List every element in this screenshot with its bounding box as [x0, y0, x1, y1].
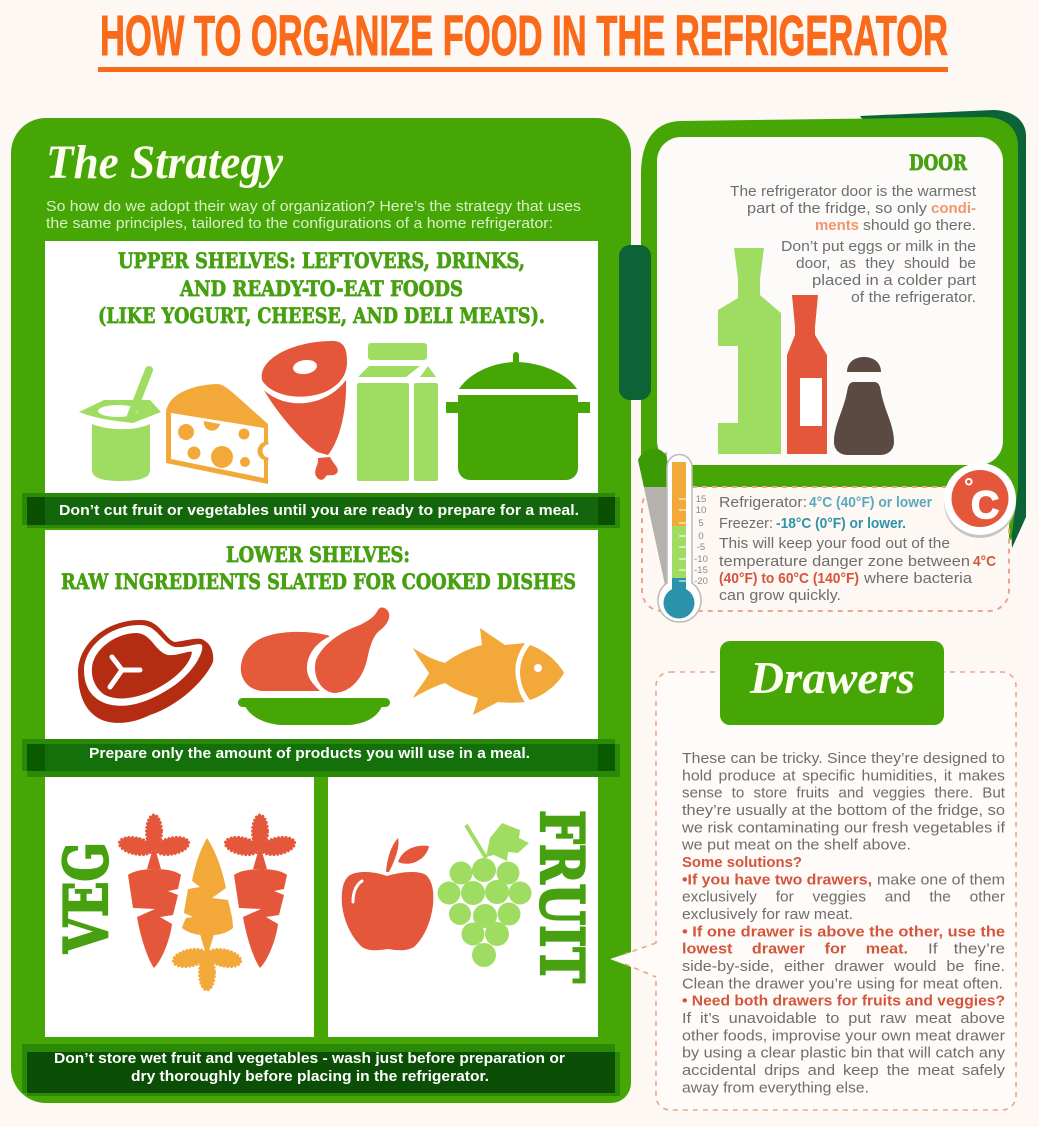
- intro text: [46, 199, 581, 232]
- intro text: So how do we adopt their way of organization? Here’s the strategy that uses: [46, 199, 581, 215]
- thermometer: [638, 448, 708, 622]
- icon: left carrot: [118, 815, 190, 968]
- panel: temperature: [642, 487, 1009, 611]
- panel: the strategy: [11, 118, 631, 1103]
- icon: middle carrot: [172, 838, 242, 990]
- icon: apple: [342, 838, 433, 950]
- drawers text: Some solutions?: [682, 854, 802, 871]
- drawers text: make one of them: [877, 871, 1005, 888]
- temperature text: 4°C: [973, 553, 996, 570]
- icon: ham: [262, 341, 347, 480]
- heading: upper shelves: (LIKE YOGURT, CHEESE, AND DELI MEATS).: [98, 303, 545, 328]
- drawers text: If it’s unavoidable to put raw meat above: [682, 1010, 1005, 1027]
- thermometer scale: 0: [698, 531, 704, 542]
- icon: celsius badge: [944, 463, 1016, 538]
- door text: ments: [815, 217, 859, 234]
- drawers text: exclusively for raw meat.: [682, 906, 853, 923]
- heading: drawers: Drawers: [749, 652, 915, 703]
- door text: [730, 183, 977, 306]
- drawers text: they’re usually at the bottom of the fridge, so: [682, 802, 1005, 819]
- icon: red bottle: [787, 295, 827, 454]
- label: veg: VEG: [52, 842, 122, 954]
- heading: lower shelves: [61, 542, 576, 594]
- panel: veg: [45, 777, 314, 1037]
- heading: drawers: [720, 641, 944, 725]
- callout band: cut fruit: Don’t cut fruit or vegetables until you are ready to prepare for a meal.: [59, 502, 579, 519]
- thermometer scale: -20: [694, 576, 708, 587]
- callout band: wet fruit: [22, 1044, 620, 1096]
- drawers text: away from everything else.: [682, 1079, 869, 1096]
- drawers text: we put meat on the shelf above.: [681, 837, 911, 854]
- drawers text: sense to store fruits and veggies there. But: [682, 785, 1006, 802]
- heading: upper shelves: AND READY-TO-EAT FOODS: [179, 276, 463, 301]
- icon: right carrot: [224, 815, 296, 968]
- drawers text: we risk contaminating our fresh vegetables if: [681, 819, 1006, 836]
- heading: upper shelves: UPPER SHELVES: LEFTOVERS, DRINKS,: [118, 248, 525, 273]
- panel: fruit: [328, 777, 598, 1037]
- panel: refrigerator door: [641, 110, 1026, 548]
- door text: placed in a colder part: [812, 272, 977, 289]
- icon: roast chicken: [238, 607, 390, 725]
- door text: part of the fridge, so only: [747, 200, 928, 217]
- speech tail: [610, 943, 658, 977]
- temperature text: 4°C (40°F) or lower: [809, 494, 932, 511]
- drawers text: Clean the drawer you’re using for meat often.: [682, 975, 1003, 992]
- callout band: cut fruit: [22, 493, 620, 528]
- callout band: prepare only: [22, 739, 620, 777]
- door text: door, as they should be: [796, 255, 976, 272]
- icon: cheese: [166, 384, 278, 484]
- heading: door: DOOR: [909, 150, 967, 175]
- callout band: prepare only: Prepare only the amount of products you will use in a meal.: [89, 745, 530, 762]
- drawers text: •If you have two drawers,: [682, 871, 872, 888]
- thermometer scale: -10: [694, 554, 708, 565]
- drawers text: accidental drips and keep the meat safely: [682, 1062, 1006, 1079]
- icon: fish: [413, 628, 564, 715]
- heading: upper shelves: [98, 248, 545, 328]
- label: fruit: FRUIT: [526, 810, 596, 983]
- temperature text: where bacteria: [863, 570, 973, 587]
- temperature text: [719, 494, 996, 604]
- icon: celsius badge: °: [964, 474, 974, 501]
- icon: celsius badge: C: [971, 484, 999, 527]
- door text: Don’t put eggs or milk in the: [781, 238, 976, 255]
- icon: cooking pot: [446, 352, 590, 480]
- drawers text: • If one drawer is above the other, use the: [682, 923, 1005, 940]
- door text: The refrigerator door is the warmest: [730, 183, 977, 200]
- drawers text: by using a clear plastic bin that will catch any: [682, 1045, 1006, 1062]
- icon: grapes: [438, 823, 532, 967]
- thermometer scale: -15: [694, 565, 708, 576]
- icon: steak: [78, 620, 213, 723]
- temperature text: (40°F) to 60°C (140°F): [719, 570, 859, 587]
- panel: drawers: [610, 641, 1016, 1110]
- icon: green bottle: [718, 248, 781, 454]
- thermometer scale: 10: [696, 505, 706, 516]
- panel: upper shelves: [45, 241, 598, 494]
- drawers text: side-by-side, either drawer would be fine.: [682, 958, 1005, 975]
- heading: lower shelves: LOWER SHELVES:: [226, 542, 410, 567]
- temperature text: Freezer:: [719, 515, 773, 532]
- callout text: dry thoroughly before placing in the refrigerator.: [131, 1068, 489, 1085]
- temperature text: -18°C (0°F) or lower.: [776, 515, 906, 532]
- door text: of the refrigerator.: [851, 289, 976, 306]
- drawers text: hold produce at specific humidities, it makes: [682, 767, 1005, 784]
- icon: milk carton: [357, 343, 438, 481]
- temperature text: Refrigerator:: [719, 494, 807, 511]
- temperature text: can grow quickly.: [719, 587, 841, 604]
- drawers text: exclusively for veggies and the other: [682, 889, 1005, 906]
- temperature text: This will keep your food out of the: [719, 535, 950, 552]
- drawers text: lowest drawer for meat.: [682, 941, 908, 958]
- drawers text: • Need both drawers for fruits and veggies?: [682, 993, 1005, 1010]
- panel: lower shelves: [45, 530, 598, 741]
- door handle: [619, 245, 651, 400]
- icon: shaker: [834, 357, 894, 455]
- callout text: Don’t store wet fruit and vegetables - wash just before preparation or: [54, 1050, 565, 1067]
- drawers text: other foods, improvise your own meat drawer: [682, 1027, 1005, 1044]
- drawers text: If they’re: [928, 941, 1005, 958]
- door text: condi-: [931, 200, 976, 217]
- heading: the strategy: The Strategy: [46, 136, 284, 189]
- door text: should go there.: [863, 217, 976, 234]
- temperature text: temperature danger zone between: [719, 553, 970, 570]
- drawers text: These can be tricky. Since they’re designed to: [682, 750, 1005, 767]
- thermometer scale: [694, 494, 708, 587]
- heading: lower shelves: RAW INGREDIENTS SLATED FOR COOKED DISHES: [61, 569, 576, 594]
- icon: yogurt: [79, 370, 161, 481]
- intro text: the same principles, tailored to the configurations of a home refrigerator:: [46, 216, 553, 232]
- drawers text: [681, 750, 1006, 1096]
- thermometer scale: 15: [696, 494, 706, 505]
- thermometer scale: 5: [698, 518, 704, 529]
- thermometer scale: -5: [697, 542, 705, 553]
- callout text: [54, 1050, 565, 1085]
